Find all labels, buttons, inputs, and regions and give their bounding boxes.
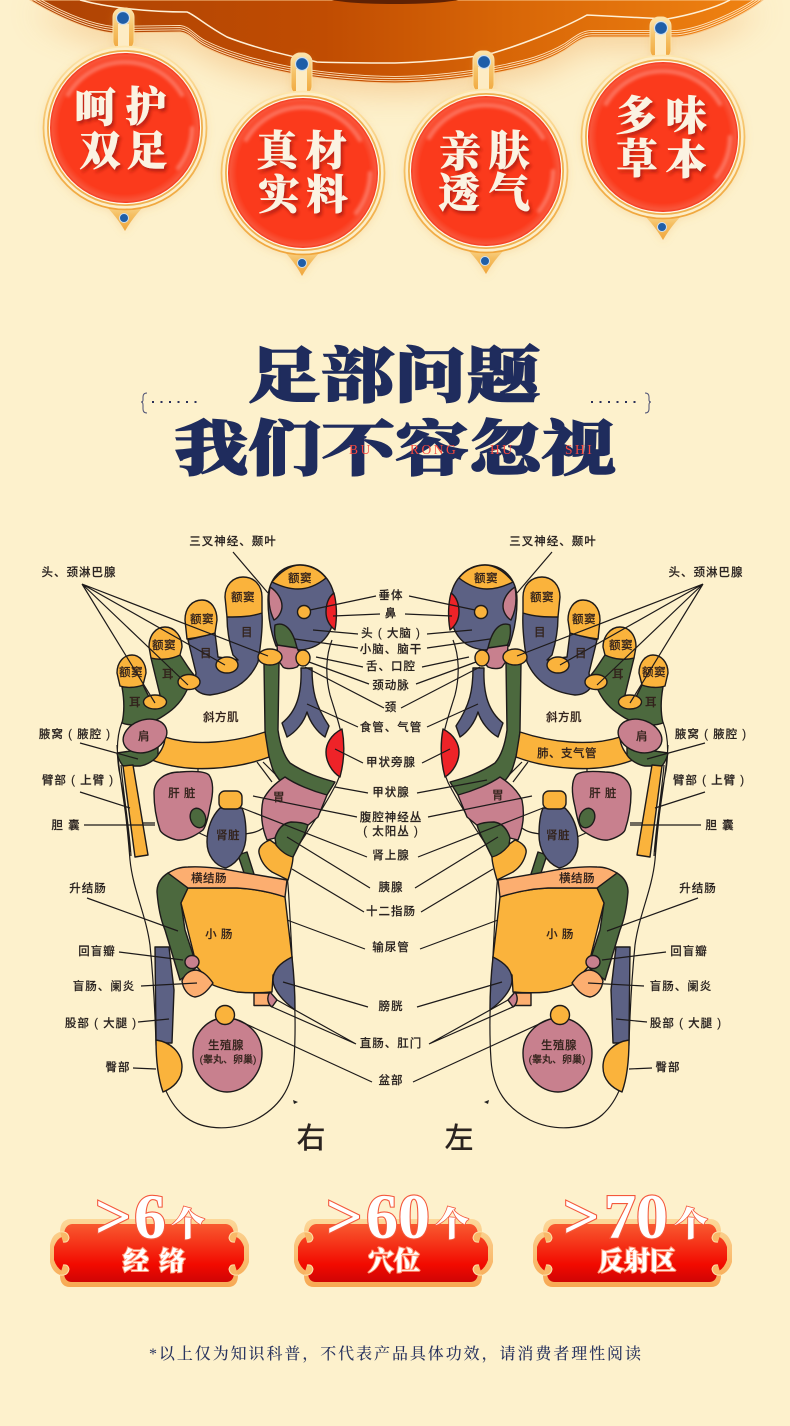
title bracket left: [141, 393, 198, 413]
labels left column: 升结肠: [69, 882, 107, 895]
labels right column: 臀部: [656, 1060, 680, 1074]
labels centre column: 输尿管: [372, 940, 410, 954]
labels inside feet: 耳: [162, 668, 174, 681]
footnote disclaimer: *以上仅为知识科普，不代表产品具体功效，请消费者理性阅读: [149, 1344, 642, 1363]
medallion: 亲肤透气: 肤: [488, 128, 530, 174]
small connectors: [130, 762, 281, 837]
medallion: 真材实料: [222, 53, 384, 276]
labels right column: 三叉神经、颞叶: [509, 534, 597, 548]
labels inside feet: 额窦: [642, 665, 666, 679]
labels inside feet: 额窦: [119, 665, 143, 679]
medallion: 多味草本: [582, 17, 744, 240]
labels inside feet: 额窦: [572, 612, 596, 626]
green spine band: [264, 663, 335, 795]
labels centre column: 甲状腺: [372, 785, 410, 799]
labels inside feet: (睾丸、卵巢): [529, 1053, 585, 1066]
labels centre column: 胰腺: [378, 880, 404, 894]
labels centre column: ( 太阳丛 ): [363, 824, 419, 838]
foot outline: [442, 640, 668, 1128]
liver: [572, 771, 631, 840]
reproductive gland: [523, 1006, 592, 1092]
labels right column: 股部 ( 大腿 ): [650, 1016, 722, 1030]
labels inside feet: 额窦: [474, 571, 498, 585]
medallion: 亲肤透气: [404, 51, 568, 274]
foot chart: left foot: [401, 552, 705, 1128]
labels right column: 头、颈淋巴腺: [668, 565, 744, 579]
stat badge: 6 经络: >: [95, 1181, 131, 1252]
labels centre column: 盆部: [378, 1073, 404, 1087]
liver: [154, 771, 212, 840]
medallion: 亲肤透气: 透: [438, 170, 480, 216]
labels centre column: 头 ( 大脑 ): [361, 626, 421, 640]
stat badge: 6 经络: [50, 1181, 249, 1287]
medallion: 呵护双足: [44, 8, 206, 231]
pinyin: BU: [349, 442, 373, 457]
bladder and rectum: [490, 957, 531, 1010]
intestines: [493, 867, 628, 997]
labels inside feet: 生殖腺: [208, 1038, 244, 1052]
labels centre column: 食管、气管: [360, 720, 422, 734]
medallion: 真材实料: 真: [256, 128, 304, 174]
stat badge: 60 穴位: >: [326, 1181, 362, 1252]
title: 我们不容忽视: [175, 416, 615, 483]
stomach and pancreas: [458, 777, 526, 880]
labels left column: 回盲瓣: [78, 944, 116, 958]
labels centre column: 舌、口腔: [366, 659, 416, 673]
stat badge: 70 反射区: >: [563, 1181, 599, 1252]
labels inside feet: 横结肠: [191, 871, 227, 885]
labels inside feet: (睾丸、卵巢): [200, 1053, 256, 1066]
medallion: 真材实料: 实: [258, 172, 302, 218]
kidney: [207, 791, 282, 968]
labels inside feet: 肝 脏: [168, 786, 196, 800]
labels inside feet: 横结肠: [559, 871, 595, 885]
pinyin: HU: [490, 442, 514, 457]
labels centre column: 十二指肠: [366, 904, 416, 918]
labels left column: 头、颈淋巴腺: [42, 565, 116, 579]
medallion: 多味草本: 本: [666, 137, 706, 183]
labels inside feet: 目: [200, 647, 212, 660]
labels centre column: 肾上腺: [372, 848, 410, 862]
labels right column: 胆 囊: [705, 818, 735, 832]
labels right column: 升结肠: [679, 882, 717, 895]
labels inside feet: 小 肠: [205, 928, 233, 941]
red thyroid: [326, 729, 344, 777]
labels inside feet: 肾脏: [216, 828, 240, 842]
stat badge: 60 穴位: 穴位: [368, 1247, 420, 1276]
bladder and rectum: [254, 957, 295, 1010]
labels inside feet: 耳: [645, 696, 657, 709]
pinyin: RONG: [410, 442, 458, 457]
labels right column: 盲肠、阑炎: [650, 979, 712, 993]
labels inside feet: [119, 571, 666, 1066]
labels centre column: 颈: [385, 701, 397, 714]
labels inside feet: 额窦: [288, 571, 312, 585]
red thyroid: [441, 729, 459, 777]
labels inside feet: 肾脏: [546, 828, 570, 842]
labels right column: 腋窝 ( 腋腔 ): [675, 727, 747, 741]
labels centre column: 直肠、肛门: [360, 1036, 422, 1050]
labels right column: 臂部 ( 上臂 ): [673, 773, 745, 787]
medallion: 多味草本: 草: [616, 136, 658, 182]
labels left column: 臂部 ( 上臂 ): [42, 773, 114, 787]
trachea: [456, 668, 503, 737]
foot side captions: 右: [296, 1122, 326, 1155]
labels inside feet: 小 肠: [546, 928, 574, 941]
intestines: [157, 867, 292, 997]
medallion: 多味草本: 味: [666, 93, 706, 139]
labels inside feet: 目: [575, 647, 587, 660]
medallion: 呵护双足: 双: [80, 128, 120, 174]
stat badge: 60 穴位: 个: [435, 1206, 469, 1244]
medallion: 呵护双足: 护: [126, 84, 166, 130]
labels inside feet: 额窦: [530, 590, 554, 604]
medallion: 亲肤透气: 亲: [440, 129, 482, 175]
title bracket right: [591, 393, 651, 413]
labels centre column: 腹腔神经丛: [360, 810, 422, 824]
foot chart: right foot: [80, 552, 384, 1128]
shoulder and lung band: [117, 713, 269, 857]
green spine band: [450, 663, 521, 795]
labels inside feet: 肝 脏: [589, 786, 617, 800]
stomach and pancreas: [259, 777, 327, 880]
stat badge: 70 反射区: 反射区: [598, 1247, 676, 1276]
labels inside feet: 胃: [492, 789, 504, 802]
labels inside feet: 耳: [612, 668, 624, 681]
medallion: 呵护双足: 足: [126, 128, 168, 174]
medallion: 真材实料: 料: [306, 172, 348, 218]
foot outline: [117, 640, 343, 1128]
labels inside feet: 耳: [129, 696, 141, 709]
small arrow mark: [484, 1100, 489, 1104]
trachea: [282, 668, 329, 737]
medallion: 亲肤透气: 气: [488, 170, 530, 216]
labels left column: 腋窝 ( 腋腔 ): [39, 727, 111, 741]
small connectors: [504, 762, 655, 837]
thigh and buttock: [155, 947, 182, 1092]
toes 2 to 5: [117, 577, 262, 725]
stat badge: 6 经络: 个: [171, 1206, 205, 1244]
labels left column: 股部 ( 大腿 ): [65, 1016, 137, 1030]
labels left column: 三叉神经、颞叶: [189, 534, 277, 548]
kidney: [503, 791, 578, 968]
top banner: [30, 0, 763, 93]
labels inside feet: 肩: [636, 729, 648, 743]
big toe: [268, 565, 336, 669]
medallion: 真材实料: 材: [306, 128, 346, 174]
stat badge: 60 穴位: 60: [366, 1181, 430, 1252]
labels inside feet: 胃: [273, 791, 285, 804]
labels left column: 盲肠、阑炎: [73, 979, 135, 993]
labels inside feet: 肩: [138, 729, 150, 743]
pinyin: SHI: [565, 442, 594, 457]
labels centre column: 甲状旁腺: [366, 755, 416, 769]
thigh and buttock: [603, 947, 630, 1092]
labels centre column: 颈动脉: [372, 678, 410, 692]
labels inside feet: 目: [534, 626, 546, 639]
labels inside feet: 斜方肌: [546, 710, 582, 724]
labels right column: 回盲瓣: [670, 944, 708, 958]
leader lines: [401, 552, 705, 1082]
big toe: [449, 565, 517, 669]
labels centre column: 鼻: [385, 606, 397, 620]
labels inside feet: 生殖腺: [541, 1038, 577, 1052]
leader lines: [80, 552, 384, 1082]
stat badge: 70 反射区: 70: [604, 1181, 668, 1252]
labels centre column: 膀胱: [378, 999, 404, 1013]
labels centre column: 小脑、脑干: [360, 642, 422, 656]
labels inside feet: 额窦: [609, 638, 633, 652]
title: 足部问题: [248, 343, 540, 410]
foot side captions: 左: [444, 1122, 474, 1155]
labels inside feet: 斜方肌: [203, 710, 239, 724]
shoulder and lung band: [516, 713, 668, 857]
labels inside feet: 目: [241, 626, 253, 639]
medallion: 多味草本: 多: [616, 93, 656, 139]
stat badge: 6 经络: 6: [134, 1181, 166, 1252]
labels inside feet: 额窦: [152, 638, 176, 652]
stat badge: 70 反射区: 个: [674, 1206, 708, 1244]
medallion: 呵护双足: 呵: [74, 85, 116, 131]
stat badge: 70 反射区: [533, 1181, 732, 1287]
stat badge: 60 穴位: [294, 1181, 493, 1287]
small arrow mark: [293, 1100, 298, 1104]
toes 2 to 5: [523, 577, 668, 725]
labels centre column: 垂体: [378, 588, 404, 602]
title: [175, 343, 615, 483]
labels inside feet: 肺、支气管: [537, 746, 597, 760]
stat badge: 6 经络: 经 络: [123, 1247, 187, 1276]
labels inside feet: 额窦: [231, 590, 255, 604]
labels left column: 臀部: [106, 1060, 130, 1074]
labels left column: 胆 囊: [51, 818, 81, 832]
reproductive gland: [193, 1006, 262, 1092]
labels inside feet: 额窦: [190, 612, 214, 626]
